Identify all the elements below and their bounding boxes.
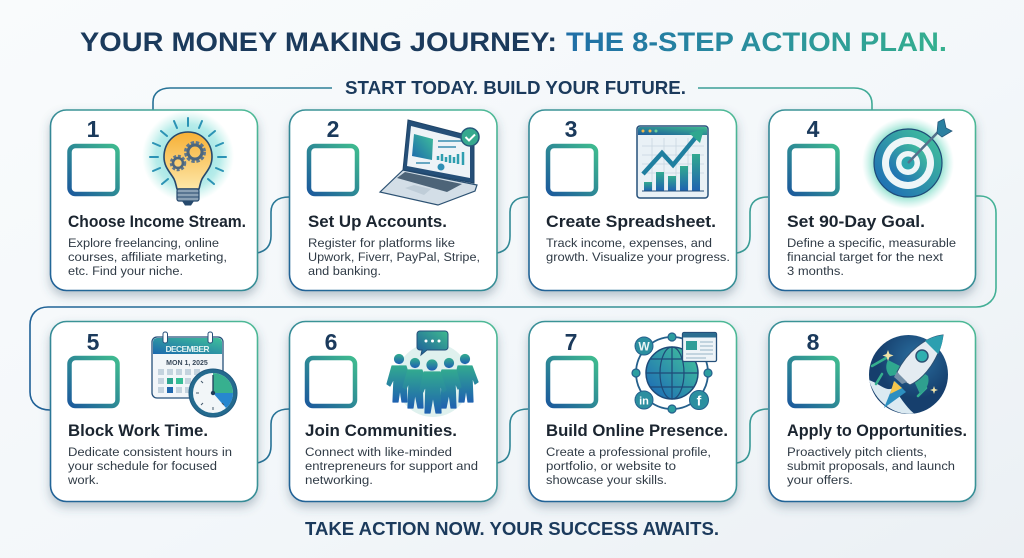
icon: rocket launching: [869, 335, 948, 414]
description: [67, 445, 232, 487]
icon: globe with social nodes: in: [639, 396, 649, 408]
card background: [290, 322, 497, 502]
description: Explore freelancing, online: [68, 236, 219, 250]
step number: 7: [565, 329, 577, 355]
heading: Apply to Opportunities.: [787, 422, 967, 440]
heading: Create Spreadsheet.: [546, 213, 716, 231]
panel: step 3: [529, 110, 736, 290]
card background: [50, 110, 258, 290]
description: and banking.: [308, 264, 381, 278]
step number: 8: [807, 329, 820, 355]
icon: calendar with clock: MON 1, 2025: [166, 360, 208, 367]
step number: 6: [325, 329, 337, 355]
description: portfolio, or website to: [546, 459, 676, 473]
description: [68, 236, 227, 278]
description: entrepreneurs for support and: [305, 459, 478, 473]
checkbox: [548, 146, 596, 194]
description: 3 months.: [787, 264, 844, 278]
icon: light bulb with gears: [142, 110, 234, 206]
description: your offers.: [787, 473, 853, 487]
description: courses, affiliate marketing,: [68, 250, 227, 264]
description: Dedicate consistent hours in: [68, 445, 232, 459]
title: THE 8-STEP ACTION PLAN.: [566, 27, 947, 57]
description: [546, 445, 711, 487]
description: growth. Visualize your progress.: [546, 250, 730, 264]
card background: [290, 110, 497, 290]
description: showcase your skills.: [546, 473, 667, 487]
checkbox: [70, 146, 118, 194]
checkbox: [790, 358, 838, 406]
step number: 5: [87, 329, 100, 355]
description: submit proposals, and launch: [787, 459, 955, 473]
title: [80, 27, 947, 57]
description: Proactively pitch clients,: [787, 445, 927, 459]
icon: target with arrow: [862, 117, 954, 209]
description: your schedule for focused: [68, 459, 217, 473]
description: [787, 236, 956, 278]
heading: Set Up Accounts.: [308, 213, 447, 231]
card background: [769, 110, 976, 290]
card background: [529, 110, 736, 290]
description: work.: [67, 473, 99, 487]
icon: spreadsheet with growth chart: [637, 126, 708, 198]
description: Register for platforms like: [308, 236, 455, 250]
checkbox: [790, 146, 838, 194]
description: etc. Find your niche.: [68, 264, 183, 278]
icon: laptop with check badge: [380, 120, 479, 205]
card background: [529, 322, 736, 502]
description: [546, 236, 730, 264]
icon: globe with social nodes: f: [697, 392, 702, 408]
step number: 4: [807, 116, 820, 142]
heading: Choose Income Stream.: [68, 213, 246, 231]
description: [305, 445, 478, 487]
description: Track income, expenses, and: [546, 236, 712, 250]
icon: globe with social nodes: [632, 332, 716, 413]
checkbox: [548, 358, 596, 406]
icon: calendar with clock: DECEMBER: [166, 344, 210, 354]
footer call to action: TAKE ACTION NOW. YOUR SUCCESS AWAITS.: [305, 518, 719, 539]
heading: Set 90-Day Goal.: [787, 213, 925, 231]
checkbox: [70, 358, 118, 406]
icon: group of people with speech bubble: [387, 331, 478, 417]
panel: step 2: [290, 110, 497, 290]
description: Connect with like-minded: [305, 445, 452, 459]
description: networking.: [305, 473, 373, 487]
checkbox: [309, 146, 357, 194]
description: [787, 445, 955, 487]
heading: Join Communities.: [305, 422, 457, 440]
panel: step 1: [50, 110, 258, 290]
icon: calendar with clock: [152, 332, 237, 417]
panel: step 8: [769, 322, 976, 502]
title: YOUR MONEY MAKING JOURNEY:: [80, 27, 557, 57]
card background: [50, 322, 258, 502]
connectors between steps: [30, 88, 996, 463]
step number: 3: [565, 116, 577, 142]
panel: step 7: [529, 322, 736, 502]
panel: step 5: [50, 322, 258, 502]
panel: step 4: [769, 110, 976, 290]
description: financial target for the next: [787, 250, 944, 264]
step number: 1: [87, 116, 100, 142]
description: Create a professional profile,: [546, 445, 711, 459]
step number: 2: [327, 116, 339, 142]
card background: [769, 322, 976, 502]
checkbox: [307, 358, 355, 406]
heading: Block Work Time.: [68, 422, 208, 440]
icon: globe with social nodes: W: [638, 340, 650, 354]
description: [308, 236, 480, 278]
heading: Build Online Presence.: [546, 422, 728, 440]
description: Define a specific, measurable: [787, 236, 956, 250]
subtitle: START TODAY. BUILD YOUR FUTURE.: [345, 77, 686, 98]
panel: step 6: [290, 322, 497, 502]
description: Upwork, Fiverr, PayPal, Stripe,: [308, 250, 480, 264]
